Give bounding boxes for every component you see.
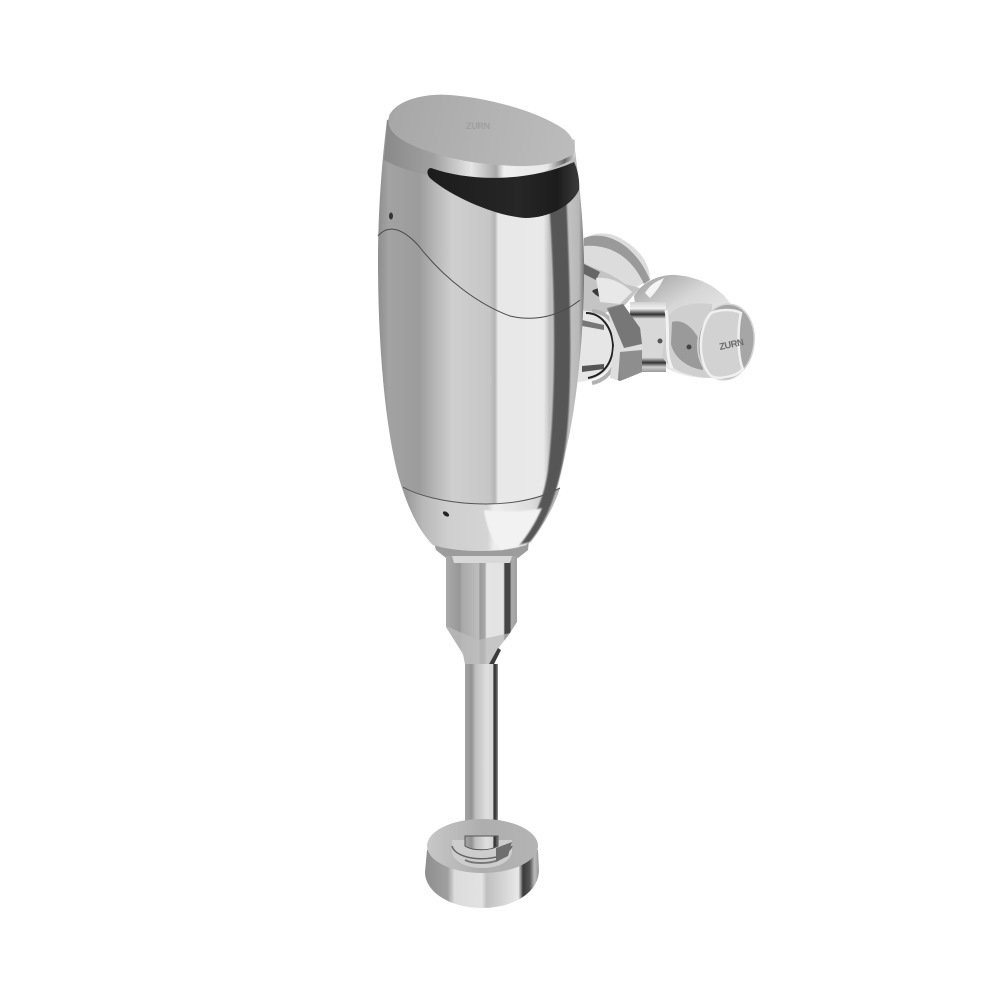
horizontal tube xyxy=(630,302,666,372)
sensor window xyxy=(427,162,579,218)
lower neck and pipe xyxy=(433,540,529,842)
lower seam xyxy=(403,487,560,504)
logo on cap: ZURN xyxy=(466,121,490,131)
pipe base collar xyxy=(452,840,512,868)
flange collar under body xyxy=(433,540,529,558)
flange skirt xyxy=(425,850,539,908)
vertical pipe xyxy=(465,664,498,842)
elbow dome xyxy=(634,275,730,378)
access panel seam xyxy=(378,229,580,318)
bottom screw xyxy=(442,510,450,518)
threaded connector xyxy=(576,311,612,382)
body screw xyxy=(389,212,393,220)
push button xyxy=(693,300,759,384)
pipe base ring xyxy=(465,836,498,850)
wall flange behind valve xyxy=(582,233,650,298)
stop body xyxy=(582,262,640,315)
button collar xyxy=(662,303,712,378)
logo on button: ZURN xyxy=(718,337,745,353)
valve: side-mounted manual override xyxy=(576,233,759,384)
seal ring xyxy=(586,313,613,378)
flange top xyxy=(427,819,538,873)
cap rim shading xyxy=(384,113,575,179)
right reflection band xyxy=(514,190,570,546)
sensor housing xyxy=(378,95,584,551)
lower dome xyxy=(403,487,560,551)
top cap face xyxy=(388,95,575,166)
main body xyxy=(378,120,584,551)
neck cylinder xyxy=(446,556,517,664)
central reflection fold xyxy=(484,508,542,550)
hex nut xyxy=(607,304,642,381)
floor flange xyxy=(425,819,539,908)
